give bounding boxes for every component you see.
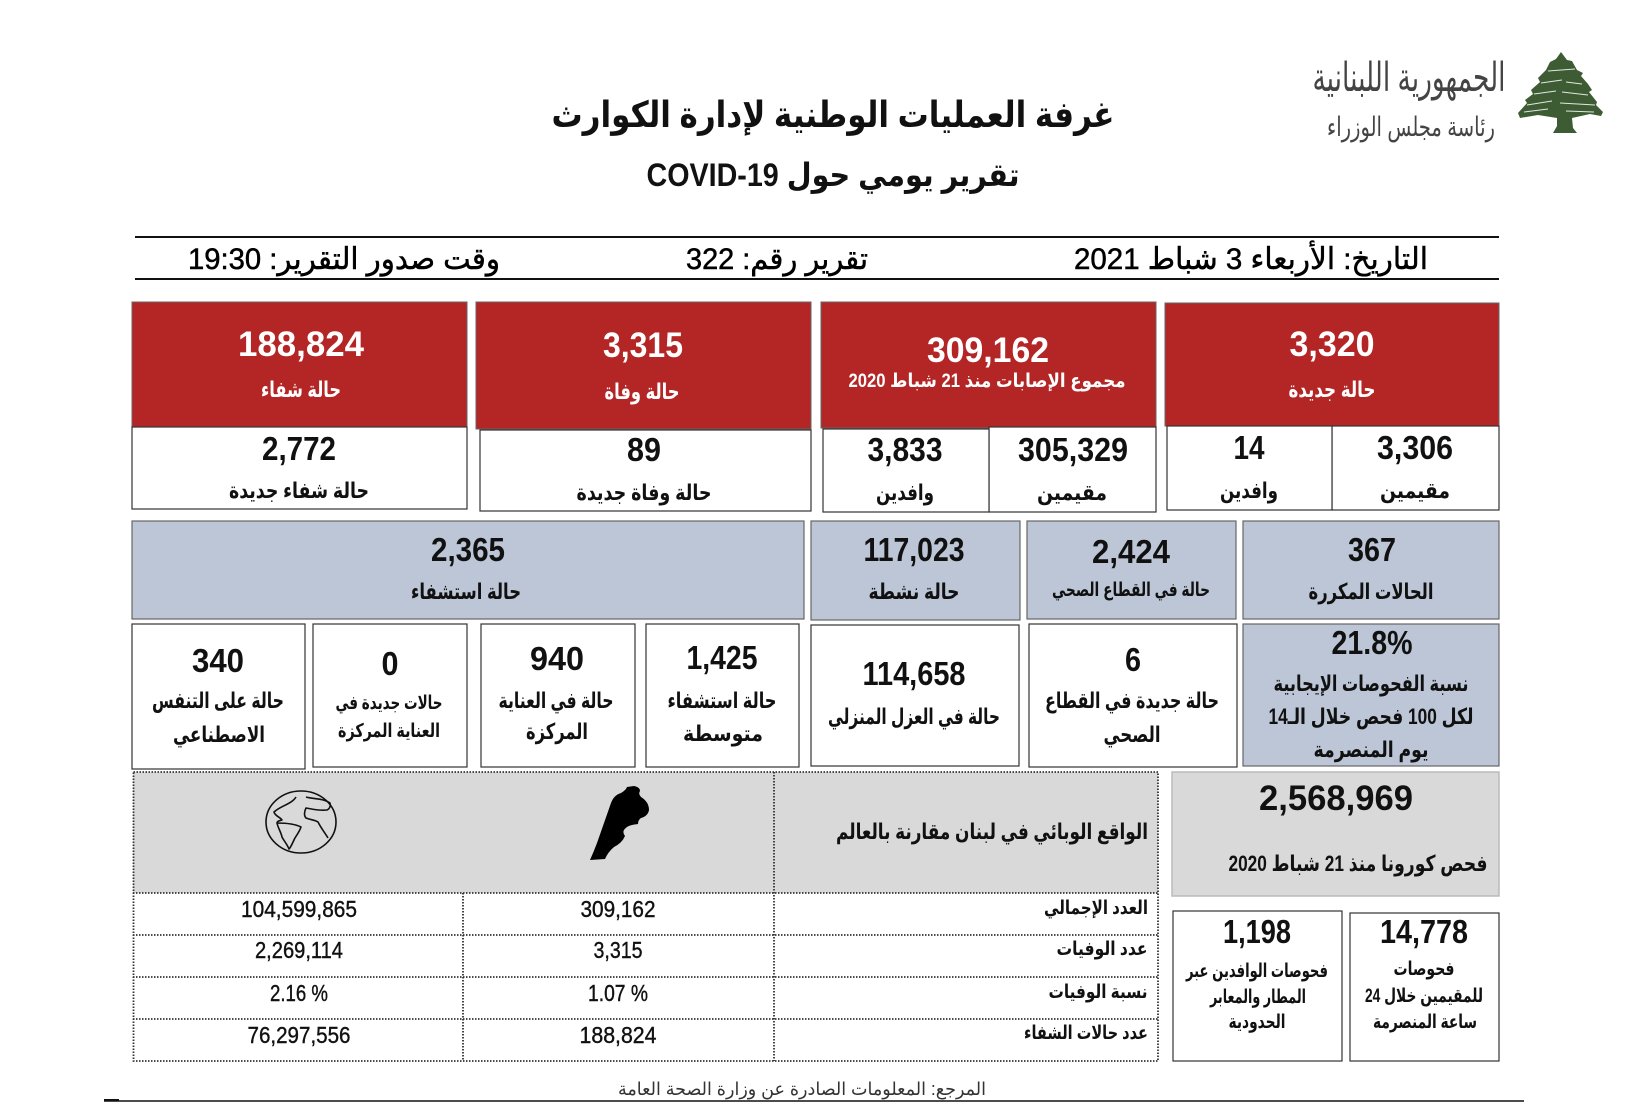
new cases residents bbox=[1332, 426, 1499, 510]
new cases red card: 3,320 bbox=[1290, 325, 1374, 364]
card: home isolation bbox=[811, 625, 1019, 766]
card: positivity rate: لكل 100 فحص خلال الـ14 bbox=[1268, 704, 1473, 729]
card: resident tests: ساعة المنصرمة bbox=[1373, 1012, 1477, 1033]
card: new cases in health sector: 6 bbox=[1125, 641, 1141, 678]
card: arrival tests bbox=[1173, 911, 1342, 1061]
recoveries red card bbox=[132, 302, 467, 427]
row: recoveries: عدد حالات الشفاء bbox=[1024, 1023, 1148, 1044]
panel: deaths bbox=[476, 302, 811, 511]
card: arrival tests: 1,198 bbox=[1223, 913, 1291, 950]
card: resident tests: فحوصات bbox=[1394, 959, 1454, 980]
card: ventilator cases: حالة على التنفس bbox=[152, 688, 284, 713]
card: cases in health sector bbox=[1027, 521, 1236, 619]
card: positivity rate: نسبة الفحوصات الإيجابية bbox=[1274, 671, 1468, 697]
card: arrival tests: الحدودية bbox=[1228, 1012, 1286, 1033]
card: resident tests: 14,778 bbox=[1380, 913, 1468, 950]
card: positivity rate bbox=[1243, 624, 1499, 766]
icon: map of Lebanon bbox=[590, 786, 649, 860]
wordmark: Lebanese Republic: الجمهورية اللبنانية bbox=[1312, 56, 1506, 101]
row: total cases: العدد الإجمالي bbox=[1044, 898, 1148, 919]
row: total cases: 309,162 bbox=[580, 896, 656, 922]
card: new cases in health sector: حالة جديدة في القطاع bbox=[1045, 688, 1219, 714]
card: total PCR tests bbox=[1172, 772, 1499, 896]
card: arrival tests: المطار والمعابر bbox=[1209, 987, 1306, 1008]
row: recoveries bbox=[248, 1022, 1148, 1048]
card: intensive care: المركزة bbox=[526, 719, 588, 745]
new deaths bbox=[480, 430, 811, 511]
table heading: الواقع الوبائي في لبنان مقارنة بالعالم bbox=[836, 819, 1148, 845]
report info bar: تقرير رقم: 322 bbox=[686, 243, 868, 277]
card: home isolation: 114,658 bbox=[862, 655, 966, 692]
card: active cases bbox=[811, 521, 1020, 620]
row: deaths: 2,269,114 bbox=[255, 937, 343, 963]
card: positivity rate: يوم المنصرمة bbox=[1314, 737, 1428, 763]
report info bar: التاريخ: الأربعاء 3 شباط 2021 bbox=[1074, 239, 1428, 277]
deaths red card bbox=[476, 302, 811, 429]
card: new intensive care cases: 0 bbox=[382, 645, 398, 682]
recoveries red card: 188,824 bbox=[238, 325, 365, 364]
subtitle: تقرير يومي حول COVID-19 bbox=[646, 157, 1020, 194]
card: cases in health sector: حالة في القطاع الصحي bbox=[1052, 580, 1210, 601]
new recoveries bbox=[132, 427, 467, 509]
row: recoveries: 76,297,556 bbox=[248, 1022, 350, 1048]
card: hospitalised cases: 2,365 bbox=[431, 531, 505, 568]
report info bar bbox=[135, 237, 1499, 279]
new deaths: 89 bbox=[627, 431, 661, 468]
card: intensive care: 940 bbox=[530, 640, 584, 677]
panel: new cases bbox=[1165, 303, 1499, 510]
new cases red card: حالة جديدة bbox=[1288, 377, 1376, 402]
card: total PCR tests: فحص كورونا منذ 21 شباط 2020 bbox=[1228, 851, 1488, 877]
total cases residents bbox=[989, 427, 1156, 512]
card: new intensive care cases: حالات جديدة في bbox=[336, 693, 442, 714]
footer source note: المرجع: المعلومات الصادرة عن وزارة الصحة العامة bbox=[618, 1079, 986, 1100]
card: cases in health sector: 2,424 bbox=[1092, 533, 1171, 570]
table: Lebanon compared with the world bbox=[133, 772, 1158, 1061]
total cases residents: مقيمين bbox=[1037, 480, 1107, 506]
panel: recoveries bbox=[132, 302, 467, 509]
panel: total cases bbox=[821, 302, 1156, 512]
row: deaths: 3,315 bbox=[594, 937, 642, 963]
card: moderate hospitalisation bbox=[646, 624, 799, 767]
card: intensive care bbox=[481, 624, 635, 767]
card: ventilator cases bbox=[132, 624, 305, 769]
total cases residents: 305,329 bbox=[1018, 431, 1128, 468]
deaths red card: 3,315 bbox=[603, 326, 683, 365]
card: arrival tests: فحوصات الوافدين عبر bbox=[1185, 961, 1328, 982]
card: home isolation: حالة في العزل المنزلي bbox=[828, 704, 1000, 730]
card: ventilator cases: الاصطناعي bbox=[173, 722, 265, 748]
card: new cases in health sector bbox=[1029, 624, 1237, 767]
report info bar: وقت صدور التقرير: 19:30 bbox=[188, 243, 500, 277]
card: hospitalised cases: حالة استشفاء bbox=[411, 579, 521, 604]
card: moderate hospitalisation: متوسطة bbox=[683, 721, 763, 747]
row: deaths: عدد الوفيات bbox=[1056, 939, 1148, 960]
icon: globe bbox=[266, 791, 336, 853]
new cases arrivals: 14 bbox=[1234, 429, 1265, 466]
row: fatality rate: نسبة الوفيات bbox=[1048, 982, 1148, 1003]
card: repeated cases: الحالات المكررة bbox=[1308, 579, 1434, 605]
new deaths: حالة وفاة جديدة bbox=[576, 480, 712, 506]
logo: Lebanese cedar and presidency wordmark bbox=[1312, 52, 1603, 143]
new recoveries: حالة شفاء جديدة bbox=[229, 478, 369, 503]
new cases red card bbox=[1165, 303, 1499, 426]
row: fatality rate: 2.16 % bbox=[270, 980, 328, 1006]
card: total PCR tests: 2,568,969 bbox=[1259, 779, 1413, 818]
total cases red card: 309,162 bbox=[927, 331, 1049, 370]
card: ventilator cases: 340 bbox=[192, 642, 244, 679]
row: deaths bbox=[255, 937, 1148, 963]
card: resident tests bbox=[1350, 913, 1499, 1061]
card: resident tests: للمقيمين خلال 24 bbox=[1365, 986, 1483, 1007]
card: active cases: 117,023 bbox=[864, 531, 964, 568]
row: fatality rate bbox=[270, 980, 1148, 1006]
card: active cases: حالة نشطة bbox=[868, 579, 960, 604]
wordmark: Presidency of the Council of Ministers: رئاسة مجلس الوزراء bbox=[1327, 112, 1495, 143]
row: total cases bbox=[241, 896, 1148, 922]
total cases red card: مجموع الإصابات منذ 21 شباط 2020 bbox=[848, 371, 1126, 392]
card: moderate hospitalisation: حالة استشفاء bbox=[668, 688, 776, 713]
total cases red card bbox=[821, 302, 1156, 428]
deaths red card: حالة وفاة bbox=[604, 379, 680, 405]
icon: cedar tree bbox=[1518, 52, 1603, 133]
card: new cases in health sector: الصحي bbox=[1104, 722, 1160, 748]
card: new intensive care cases bbox=[313, 624, 467, 767]
row: total cases: 104,599,865 bbox=[241, 896, 357, 922]
card: repeated cases bbox=[1243, 521, 1499, 619]
new cases arrivals bbox=[1167, 426, 1332, 510]
card: intensive care: حالة في العناية bbox=[498, 688, 614, 714]
new cases arrivals: وافدين bbox=[1220, 478, 1278, 504]
card: repeated cases: 367 bbox=[1348, 531, 1396, 568]
total cases arrivals bbox=[823, 429, 989, 512]
card: positivity rate: 21.8% bbox=[1332, 624, 1412, 661]
row: fatality rate: 1.07 % bbox=[588, 980, 648, 1006]
total cases arrivals: وافدين bbox=[876, 480, 934, 506]
title: غرفة العمليات الوطنية لإدارة الكوارث bbox=[552, 94, 1114, 136]
new recoveries: 2,772 bbox=[262, 430, 336, 467]
total cases arrivals: 3,833 bbox=[868, 431, 942, 468]
recoveries red card: حالة شفاء bbox=[261, 377, 341, 402]
card: new intensive care cases: العناية المركزة bbox=[338, 721, 440, 742]
card: hospitalised cases bbox=[132, 521, 804, 619]
new cases residents: مقيمين bbox=[1380, 478, 1450, 504]
new cases residents: 3,306 bbox=[1377, 429, 1453, 466]
row: recoveries: 188,824 bbox=[580, 1022, 657, 1048]
card: moderate hospitalisation: 1,425 bbox=[686, 639, 758, 676]
